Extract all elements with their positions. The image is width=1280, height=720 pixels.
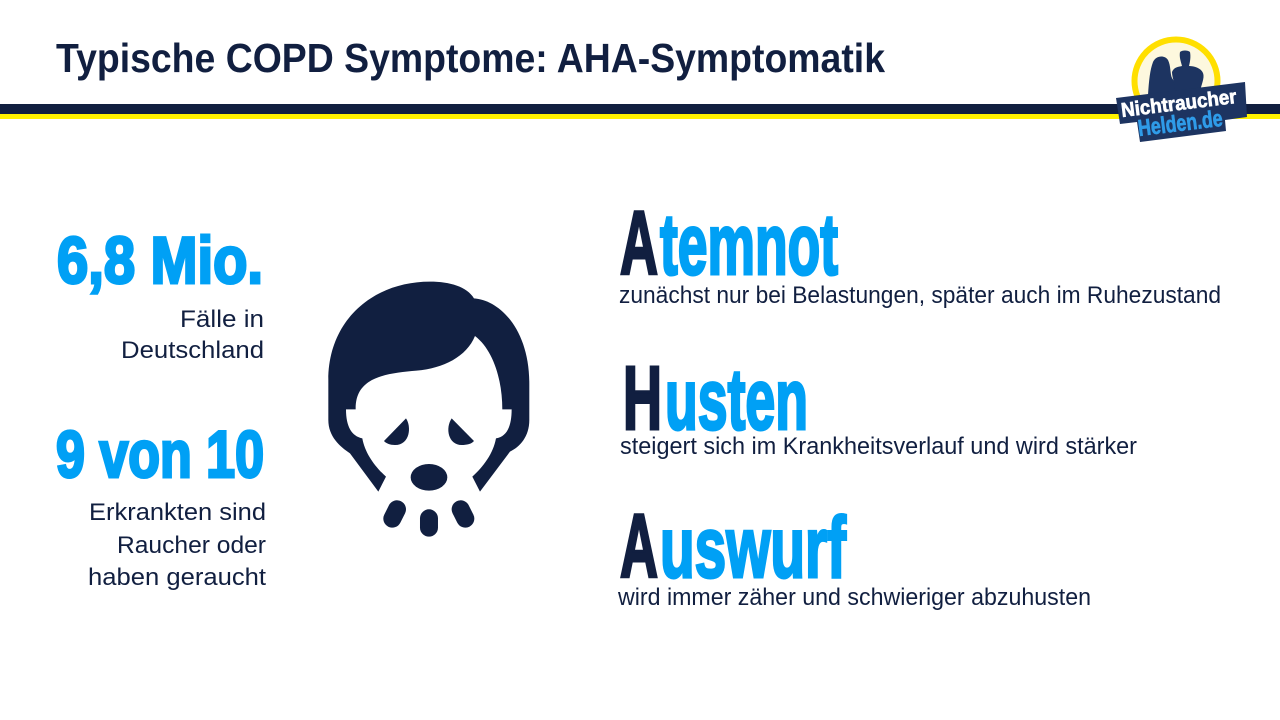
stat caption: Erkrankten sind	[89, 499, 266, 526]
icon hair and jaw	[328, 282, 529, 492]
icon mouth	[411, 464, 447, 491]
symptom: Auswurf	[617, 497, 1091, 611]
stat caption: Fälle in	[180, 306, 264, 333]
logo text: Nichtraucher: Nichtraucher	[1120, 86, 1238, 122]
stat: 6,8 Mio.	[57, 223, 264, 364]
stat caption: Deutschland	[121, 337, 264, 364]
description: steigert sich im Krankheitsverlauf und wird stärker	[620, 433, 1137, 460]
icon: coughing face	[328, 282, 529, 528]
icon right eye	[448, 418, 474, 445]
initial A: A	[620, 194, 658, 294]
stat caption: haben geraucht	[88, 564, 266, 591]
stat number: 6,8 Mio.	[57, 223, 263, 297]
initial A: A	[620, 497, 658, 597]
icon left eye	[384, 418, 409, 445]
word: temnot	[660, 197, 838, 293]
initial H: H	[623, 349, 662, 449]
symptom: Atemnot	[619, 194, 1221, 309]
description: zunächst nur bei Belastungen, später auch im Ruhezustand	[619, 282, 1221, 309]
logo ring	[1134, 40, 1218, 122]
logo text: Helden.de: Helden.de	[1136, 105, 1224, 141]
logo silhouettes	[1148, 50, 1204, 95]
word: uswurf	[660, 500, 846, 596]
icon droplets	[392, 509, 465, 528]
stat number: 9 von 10	[56, 417, 264, 491]
description: wird immer zäher und schwieriger abzuhusten	[617, 584, 1091, 611]
stat caption	[121, 306, 264, 364]
logo banner	[1116, 82, 1247, 142]
symptom: Husten	[620, 349, 1137, 460]
stat caption: Raucher oder	[117, 532, 266, 559]
logo: Nichtraucher Helden	[1116, 40, 1247, 142]
header band	[0, 104, 1280, 119]
stat: 9 von 10	[56, 417, 266, 591]
title: Typische COPD Symptome: AHA-Symptomatik	[56, 35, 885, 81]
word: usten	[665, 352, 808, 448]
stat caption	[88, 499, 266, 591]
